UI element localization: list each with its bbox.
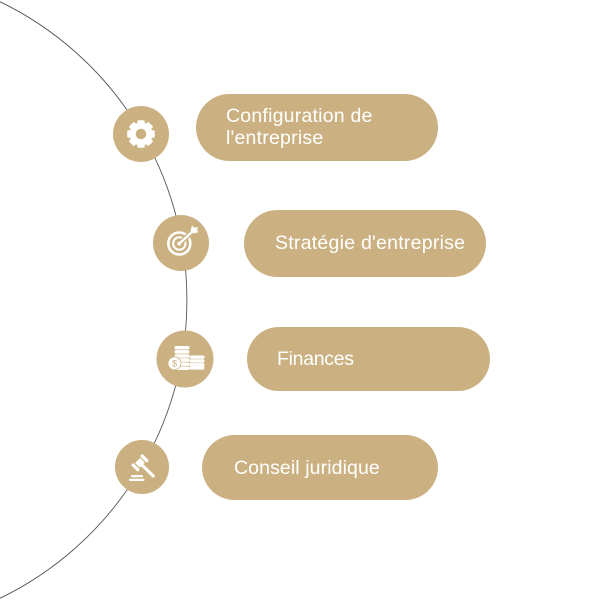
- pill: Configuration de l'entreprise: [196, 94, 438, 161]
- pill: Stratégie d'entreprise: [244, 210, 486, 277]
- icon: coin stacks: [156, 330, 214, 388]
- icon: target with arrow: [153, 215, 209, 271]
- pill: Conseil juridique: [202, 435, 438, 500]
- icon: gavel: [115, 440, 169, 494]
- label: Conseil juridique: Conseil juridique: [234, 457, 380, 479]
- label: Configuration de l'entreprise: l'entreprise: [226, 127, 323, 149]
- label: Configuration de l'entreprise: [226, 105, 373, 149]
- icon: gear: [113, 106, 169, 162]
- icon: coin stacks: $: [172, 358, 177, 368]
- label: Configuration de l'entreprise: Configuration de: [226, 105, 373, 127]
- label: Finances: Finances: [277, 348, 354, 370]
- pill: Finances: [247, 327, 490, 391]
- label: Stratégie d'entreprise: Stratégie d'entreprise: [275, 232, 465, 254]
- arc line: [0, 2, 187, 598]
